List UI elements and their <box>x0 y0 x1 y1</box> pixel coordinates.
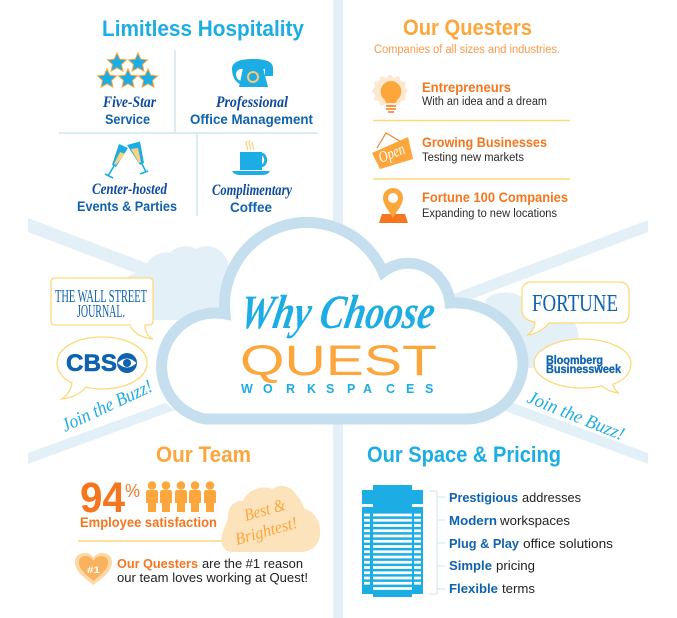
label: employee satisfaction: Employee satisfaction <box>80 515 217 530</box>
icon: number one heart <box>75 553 112 585</box>
list: features: Prestigious <box>449 490 518 505</box>
text: team loves questers: are the #1 reason <box>202 557 303 571</box>
logo: quest: QUEST <box>240 337 437 385</box>
icon: location pin <box>379 188 408 223</box>
heading: limitless hospitality: Limitless Hospitality <box>102 16 305 41</box>
stat: 94 percent: % <box>125 481 140 501</box>
text: growing businesses: Growing Businesses <box>422 135 547 150</box>
list: features: Plug & Play <box>449 536 520 551</box>
text: team loves questers <box>117 557 308 585</box>
callout: wall street journal <box>51 278 153 339</box>
icon: five people <box>146 481 216 512</box>
callout: bloomberg businessweek: Businessweek <box>546 364 622 376</box>
text: growing businesses <box>422 135 547 164</box>
text: center-hosted events and parties: Center-hosted <box>92 181 168 198</box>
text: five-star service <box>102 94 157 127</box>
list: features: Modern <box>449 513 497 528</box>
list: features: addresses <box>522 490 581 505</box>
icon: five stars <box>98 53 158 87</box>
icon: office building <box>362 485 423 597</box>
icon: open sign: Open <box>376 141 408 167</box>
callout: wall street journal: JOURNAL. <box>77 301 125 321</box>
text: fortune 100 companies: Expanding to new locations <box>422 208 557 220</box>
text: growing businesses: Testing new markets <box>422 152 524 164</box>
central cloud <box>162 222 523 419</box>
stat: 94 percent: 94 <box>80 474 125 522</box>
icon: champagne glasses <box>105 142 148 178</box>
text: entrepreneurs <box>422 80 547 108</box>
text: center-hosted events and parties: Events & Parties <box>77 199 177 214</box>
back cloud left <box>122 246 232 320</box>
list: features: pricing <box>496 558 535 573</box>
tagline: join the buzz left: Join the Buzz! <box>58 376 156 437</box>
list: features: Simple <box>449 558 492 573</box>
panel: limitless hospitality <box>59 16 318 216</box>
list: features: terms <box>502 581 536 596</box>
callout: cbs <box>57 337 147 399</box>
text: fortune 100 companies <box>422 190 568 220</box>
callout: cbs: CBS <box>66 350 117 377</box>
callout: wall street journal: THE WALL STREET <box>55 286 147 306</box>
tagline: join the buzz right: Join the Buzz! <box>524 387 627 445</box>
callout: bloomberg businessweek <box>534 339 631 393</box>
title: why choose: Why Choose <box>236 286 439 339</box>
text: five-star service: Five-Star <box>102 94 157 111</box>
text: professional office management: Professional <box>215 94 288 111</box>
list: features <box>449 490 614 596</box>
panel: our questers <box>372 15 570 223</box>
callout: bloomberg businessweek: Bloomberg <box>546 355 603 367</box>
icon: number one heart: #1 <box>87 565 101 576</box>
callout: fortune: FORTUNE <box>532 291 618 317</box>
heading: our space and pricing: Our Space & Pricing <box>367 442 561 467</box>
text: team loves questers: our team loves working at Quest! <box>117 571 308 585</box>
cloud: best and brightest <box>221 486 320 552</box>
text: team loves questers: Our Questers <box>117 557 198 571</box>
text: fortune 100 companies: Fortune 100 Companies <box>422 190 568 205</box>
text: center-hosted events and parties <box>77 181 177 214</box>
heading: our questers: Our Questers <box>403 15 532 40</box>
text: complimentary coffee <box>212 182 293 215</box>
list: features: Flexible <box>449 581 498 596</box>
subheading: Companies of all sizes and industries. <box>374 44 560 56</box>
logo: workspaces: WORKSPACES <box>241 382 433 396</box>
text: entrepreneurs: Entrepreneurs <box>422 80 511 95</box>
cloud: best and brightest: Best & <box>242 495 288 525</box>
icon: light bulb <box>372 74 408 112</box>
panel: our space and pricing <box>362 442 614 597</box>
list: features: workspaces <box>499 513 571 528</box>
panel: our team <box>75 442 320 585</box>
callout: fortune <box>522 282 629 335</box>
text: complimentary coffee: Coffee <box>230 200 272 215</box>
icon: open sign <box>372 133 413 169</box>
heading: our team: Our Team <box>156 442 251 467</box>
text: complimentary coffee: Complimentary <box>212 182 293 199</box>
back cloud right <box>485 293 590 368</box>
icon: coffee cup <box>232 140 270 175</box>
text: professional office management <box>190 94 313 127</box>
list: features: office solutions <box>523 536 614 551</box>
cloud: best and brightest: Brightest! <box>233 513 300 549</box>
text: entrepreneurs: With an idea and a dream <box>422 96 547 108</box>
icon: telephone <box>232 59 273 87</box>
text: professional office management: Office Management <box>190 112 313 127</box>
text: five-star service: Service <box>105 112 150 127</box>
